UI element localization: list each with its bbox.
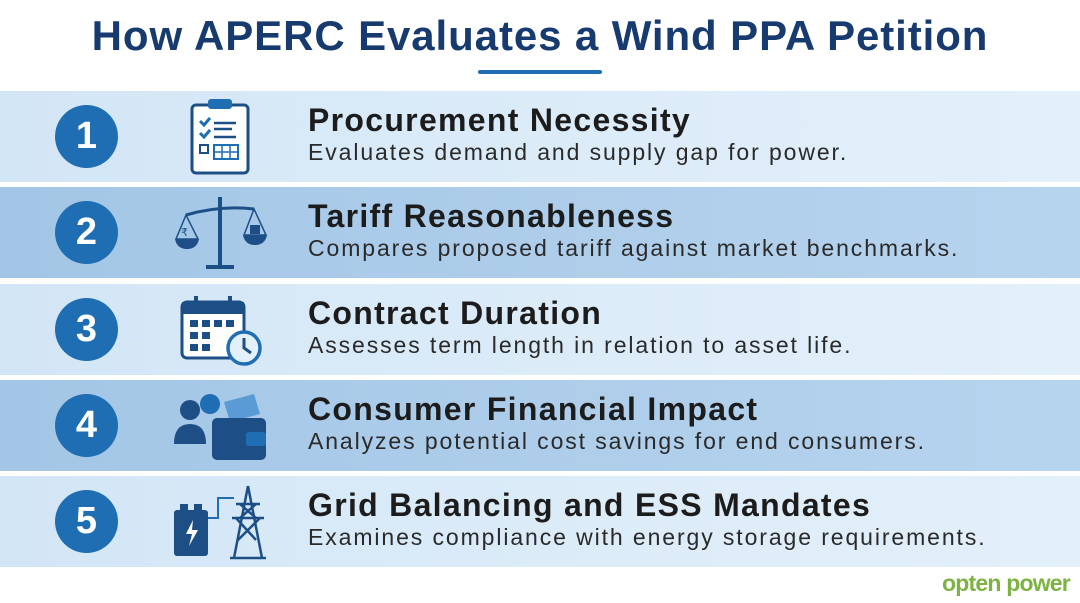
row 4	[0, 380, 1080, 471]
row 3	[0, 284, 1080, 375]
row 2	[0, 187, 1080, 278]
text 2: Compares proposed tariff against market benchmarks.	[308, 235, 959, 261]
number 2: 2	[76, 211, 97, 253]
number 5: 5	[76, 500, 97, 542]
number 4	[55, 394, 118, 457]
title: How APERC Evaluates a Wind PPA Petition	[92, 12, 988, 59]
text 5: Grid Balancing and ESS Mandates	[308, 487, 871, 523]
text 1	[308, 102, 848, 165]
number 5	[55, 490, 118, 553]
number 4: 4	[76, 404, 97, 446]
icon: clipboard	[190, 99, 250, 174]
icon: consumers wallet	[174, 394, 266, 460]
icon: scales	[174, 197, 268, 269]
number 3	[55, 298, 118, 361]
number 2	[55, 201, 118, 264]
text 1: Procurement Necessity	[308, 102, 691, 138]
logo: opten power	[942, 570, 1070, 596]
text 4: Analyzes potential cost savings for end consumers.	[308, 428, 926, 454]
text 5: Examines compliance with energy storage requirements.	[308, 524, 987, 550]
text 3	[308, 295, 852, 358]
text 1: Evaluates demand and supply gap for power.	[308, 139, 848, 165]
icon: battery and pylon	[174, 486, 266, 560]
text 2: Tariff Reasonableness	[308, 198, 674, 234]
text 4	[308, 391, 926, 454]
number 1	[55, 105, 118, 168]
icon: scales: ₹	[181, 226, 188, 239]
row 1	[0, 91, 1080, 182]
number 3: 3	[76, 308, 97, 350]
text 3: Contract Duration	[308, 295, 602, 331]
text 2	[308, 198, 959, 261]
text 4: Consumer Financial Impact	[308, 391, 758, 427]
number 1: 1	[76, 115, 97, 157]
text 5	[308, 487, 987, 550]
row 5	[0, 476, 1080, 567]
icon: calendar clock	[180, 296, 262, 366]
text 3: Assesses term length in relation to asset life.	[308, 332, 852, 358]
